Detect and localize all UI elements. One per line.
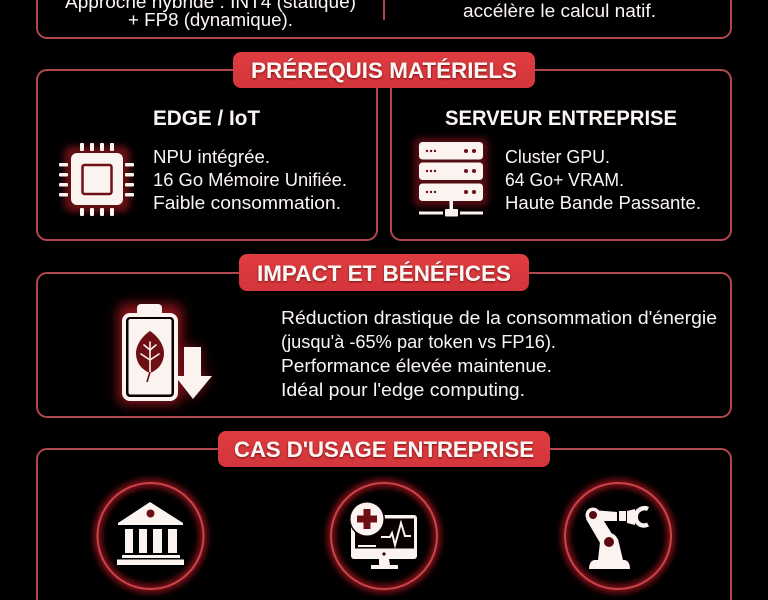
text: FP8 dynamic: + FP8 (dynamique).	[128, 10, 293, 30]
panel: top section (cropped)	[37, 0, 731, 38]
heading: enterprise server: SERVEUR ENTREPRISE	[445, 107, 677, 130]
text: server specs	[505, 147, 701, 213]
text: native compute: accélère le calcul natif.	[463, 1, 656, 21]
icon: medical monitor in circle	[331, 483, 437, 589]
heading: enterprise use cases: CAS D'USAGE ENTREPRISE	[234, 437, 534, 462]
text: edge specs	[153, 147, 347, 213]
heading: hardware prerequisites	[233, 52, 535, 88]
text: edge specs: NPU intégrée.	[153, 147, 270, 167]
text: impact details: Réduction drastique de la consommation d'énergie	[281, 308, 717, 328]
text: server specs: 64 Go+ VRAM.	[505, 170, 624, 190]
icon: bank in circle	[98, 483, 204, 589]
icon: robot arm in circle	[565, 483, 671, 589]
text: impact details: Idéal pour l'edge computing.	[281, 380, 525, 400]
text: impact details: (jusqu'à -65% par token vs FP16).	[281, 332, 556, 352]
panel: enterprise server	[391, 70, 731, 240]
heading: enterprise use cases	[218, 431, 550, 467]
heading: impact and benefits: IMPACT ET BÉNÉFICES	[257, 261, 511, 286]
text: impact details: Performance élevée maintenue.	[281, 356, 552, 376]
text: impact details	[281, 308, 717, 400]
icon: chip	[59, 143, 134, 216]
text: edge specs: Faible consommation.	[153, 193, 341, 213]
panel: enterprise use cases	[37, 449, 731, 600]
heading: impact and benefits	[239, 254, 529, 291]
icon: server rack	[414, 138, 488, 216]
heading: edge / IoT: EDGE / IoT	[153, 107, 260, 130]
heading: hardware prerequisites: PRÉREQUIS MATÉRIELS	[251, 58, 517, 83]
text: server specs: Haute Bande Passante.	[505, 193, 701, 213]
divider	[383, 0, 385, 20]
panel: edge / IoT	[37, 70, 377, 240]
text: server specs: Cluster GPU.	[505, 147, 610, 167]
panel: impact and benefits	[37, 273, 731, 417]
text: edge specs: 16 Go Mémoire Unifiée.	[153, 170, 347, 190]
icon: battery with leaf and down arrow	[118, 304, 212, 404]
